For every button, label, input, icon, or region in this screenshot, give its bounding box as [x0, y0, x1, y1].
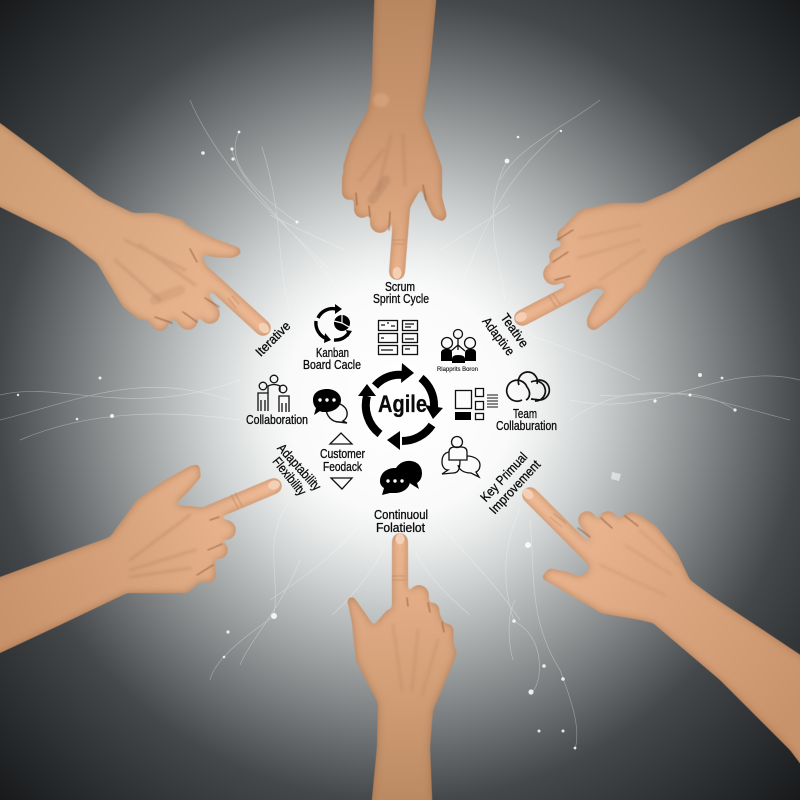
icon: collaboration people: [258, 375, 289, 412]
label: collaboration: Collaboration: [246, 412, 308, 427]
label: continuous feedback: Folatielot: [376, 520, 425, 535]
hand: top: [343, 0, 447, 279]
label: scrum sprint cycle: Sprint Cycle: [373, 291, 429, 306]
fingernail: [396, 534, 404, 544]
icon: down triangle: [331, 478, 352, 489]
fingernail: [257, 321, 271, 335]
label: key principal improvement: Key Primual: [477, 449, 530, 505]
label: team collaboration: Team: [513, 406, 537, 421]
label: team collaboration: Collaburation: [496, 418, 557, 433]
fingernail: [514, 310, 528, 324]
label: customer feedback: [320, 446, 366, 474]
icon: up triangle: [330, 433, 352, 444]
hand: bottom-left: [0, 464, 281, 662]
fingernail: [267, 479, 281, 491]
label: scrum sprint cycle: Scrum: [385, 279, 415, 294]
label: iterative adaptive: Adaptive: [479, 314, 518, 358]
label: continuous feedback: [374, 507, 428, 535]
label: small people caption: Rlapprits Boron: [437, 367, 478, 373]
center label: Agile: [378, 391, 427, 418]
label: key principal improvement: Improvement: [486, 457, 544, 517]
hand: top-right: [514, 106, 800, 331]
label: iterative: Iterative: [252, 318, 293, 359]
label: scrum sprint cycle: [373, 279, 429, 306]
hand: bottom: [347, 534, 457, 800]
label: continuous feedback: Continuoul: [374, 507, 428, 522]
fingernail: [392, 267, 402, 279]
central cycle icon: [358, 363, 443, 450]
label: team collaboration: [496, 406, 557, 433]
hand: top-left: [0, 112, 271, 335]
fingernail: [521, 487, 535, 501]
label: adaptability flexibility: Adaptability: [274, 440, 325, 494]
label: iterative adaptive: Teative: [498, 311, 532, 350]
label: kanban board cycle: [303, 345, 361, 372]
label: iterative adaptive: [479, 311, 532, 358]
icon: linked circles: [507, 372, 549, 401]
label: adaptability flexibility: Flexibility: [270, 454, 310, 499]
label: kanban board cycle: Board Cacle: [303, 357, 361, 372]
icon: layout blocks: [455, 388, 498, 420]
label: customer feedback: Customer: [320, 446, 366, 461]
label: customer feedback: Feodack: [323, 459, 362, 474]
icon: people network: [441, 330, 476, 363]
icon: person with speech bubbles: [442, 436, 480, 477]
icon: sprint board grid: [378, 320, 418, 354]
icon: cycle with pie: [316, 304, 352, 343]
label: kanban board cycle: Kanban: [316, 345, 349, 360]
icon: speech bubbles bottom: [380, 461, 422, 495]
hand: bottom-right: [521, 487, 800, 790]
icon: speech bubbles left: [313, 389, 347, 423]
